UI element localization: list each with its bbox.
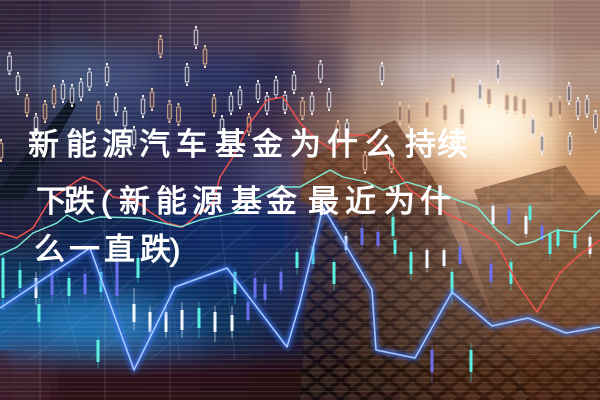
title	[28, 127, 468, 267]
building: right tower tiles	[455, 195, 600, 400]
line chart: red	[0, 97, 600, 312]
candlesticks: upper row	[0, 26, 597, 174]
title line 3: 么一直跌)	[34, 232, 180, 267]
buildings	[0, 96, 600, 400]
title line 2: 下跌(新能源基金最近为什	[36, 184, 451, 219]
building: gold rooftop left	[300, 120, 442, 220]
candlesticks: lower row	[3, 203, 590, 382]
dark diagonal beam	[0, 96, 76, 200]
line chart: teal	[0, 170, 600, 255]
line chart: glowing blue	[0, 207, 600, 370]
title line 1: 新能源汽车基金为什么持续	[28, 127, 468, 162]
building: gold rooftop right	[474, 165, 590, 205]
building: central tower tiles	[300, 180, 530, 400]
light glow	[418, 82, 562, 174]
